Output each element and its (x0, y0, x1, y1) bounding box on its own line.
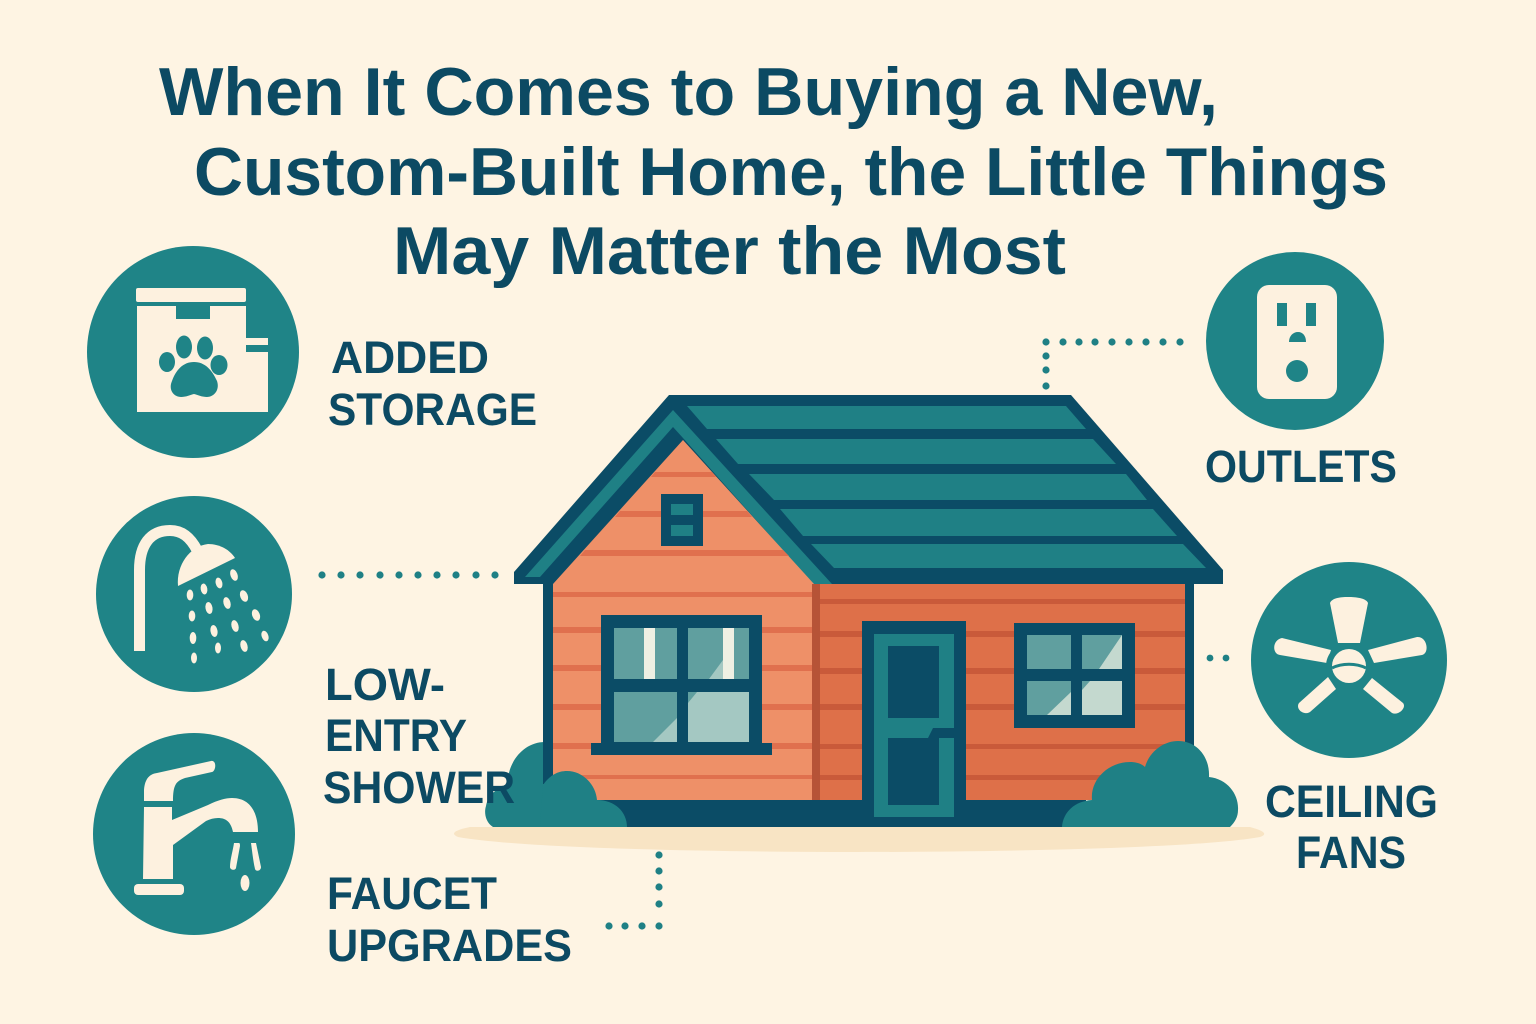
connector: outlets (1042, 338, 1184, 390)
front of left bush (540, 771, 627, 827)
dotted connectors (318, 338, 1229, 930)
icon: faucet (93, 733, 295, 935)
back of left bush (485, 742, 560, 827)
gable and left wall (553, 440, 814, 800)
label: added storage: STORAGE (328, 384, 537, 435)
wall divider (812, 584, 820, 800)
label: low-entry shower: SHOWER (323, 762, 515, 813)
wall side outlines (543, 584, 553, 784)
label: low-entry shower: LOW- (325, 659, 445, 710)
icon: ceiling fan (1251, 562, 1447, 758)
label: faucet upgrades (327, 868, 572, 971)
left window (591, 615, 772, 755)
label: low-entry shower (323, 659, 515, 813)
house illustration (454, 395, 1264, 852)
ground shadow (454, 827, 1264, 852)
right bush (1062, 741, 1238, 827)
roof base (514, 395, 1223, 584)
title (159, 54, 1388, 289)
connector: shower (318, 571, 499, 579)
attic window (661, 494, 703, 546)
label: faucet upgrades: UPGRADES (327, 920, 572, 971)
left wall siding (553, 472, 812, 779)
icon: shower head (96, 496, 292, 692)
title: When It Comes to Buying a New, (159, 54, 1218, 130)
connector: faucet (605, 851, 663, 930)
title: Custom-Built Home, the Little Things (194, 134, 1388, 210)
connector: ceiling fans (1207, 655, 1229, 661)
label: added storage: ADDED (331, 332, 489, 383)
label: ceiling fans: CEILING (1265, 776, 1438, 827)
label: ceiling fans (1265, 776, 1438, 878)
right wall siding (820, 599, 1185, 780)
label: outlets: OUTLETS (1205, 441, 1397, 492)
door (862, 621, 966, 827)
roof panels (687, 406, 1206, 568)
foundation (596, 800, 1086, 827)
right window (1014, 623, 1135, 728)
gable trim (525, 410, 832, 584)
label: ceiling fans: FANS (1296, 827, 1406, 878)
icon: storage box with paw (87, 246, 299, 458)
label: added storage (328, 332, 537, 435)
icon: outlet (1206, 252, 1384, 430)
title: May Matter the Most (393, 213, 1066, 289)
label: low-entry shower: ENTRY (325, 710, 467, 761)
right wall (814, 584, 1185, 800)
label: faucet upgrades: FAUCET (327, 868, 497, 919)
